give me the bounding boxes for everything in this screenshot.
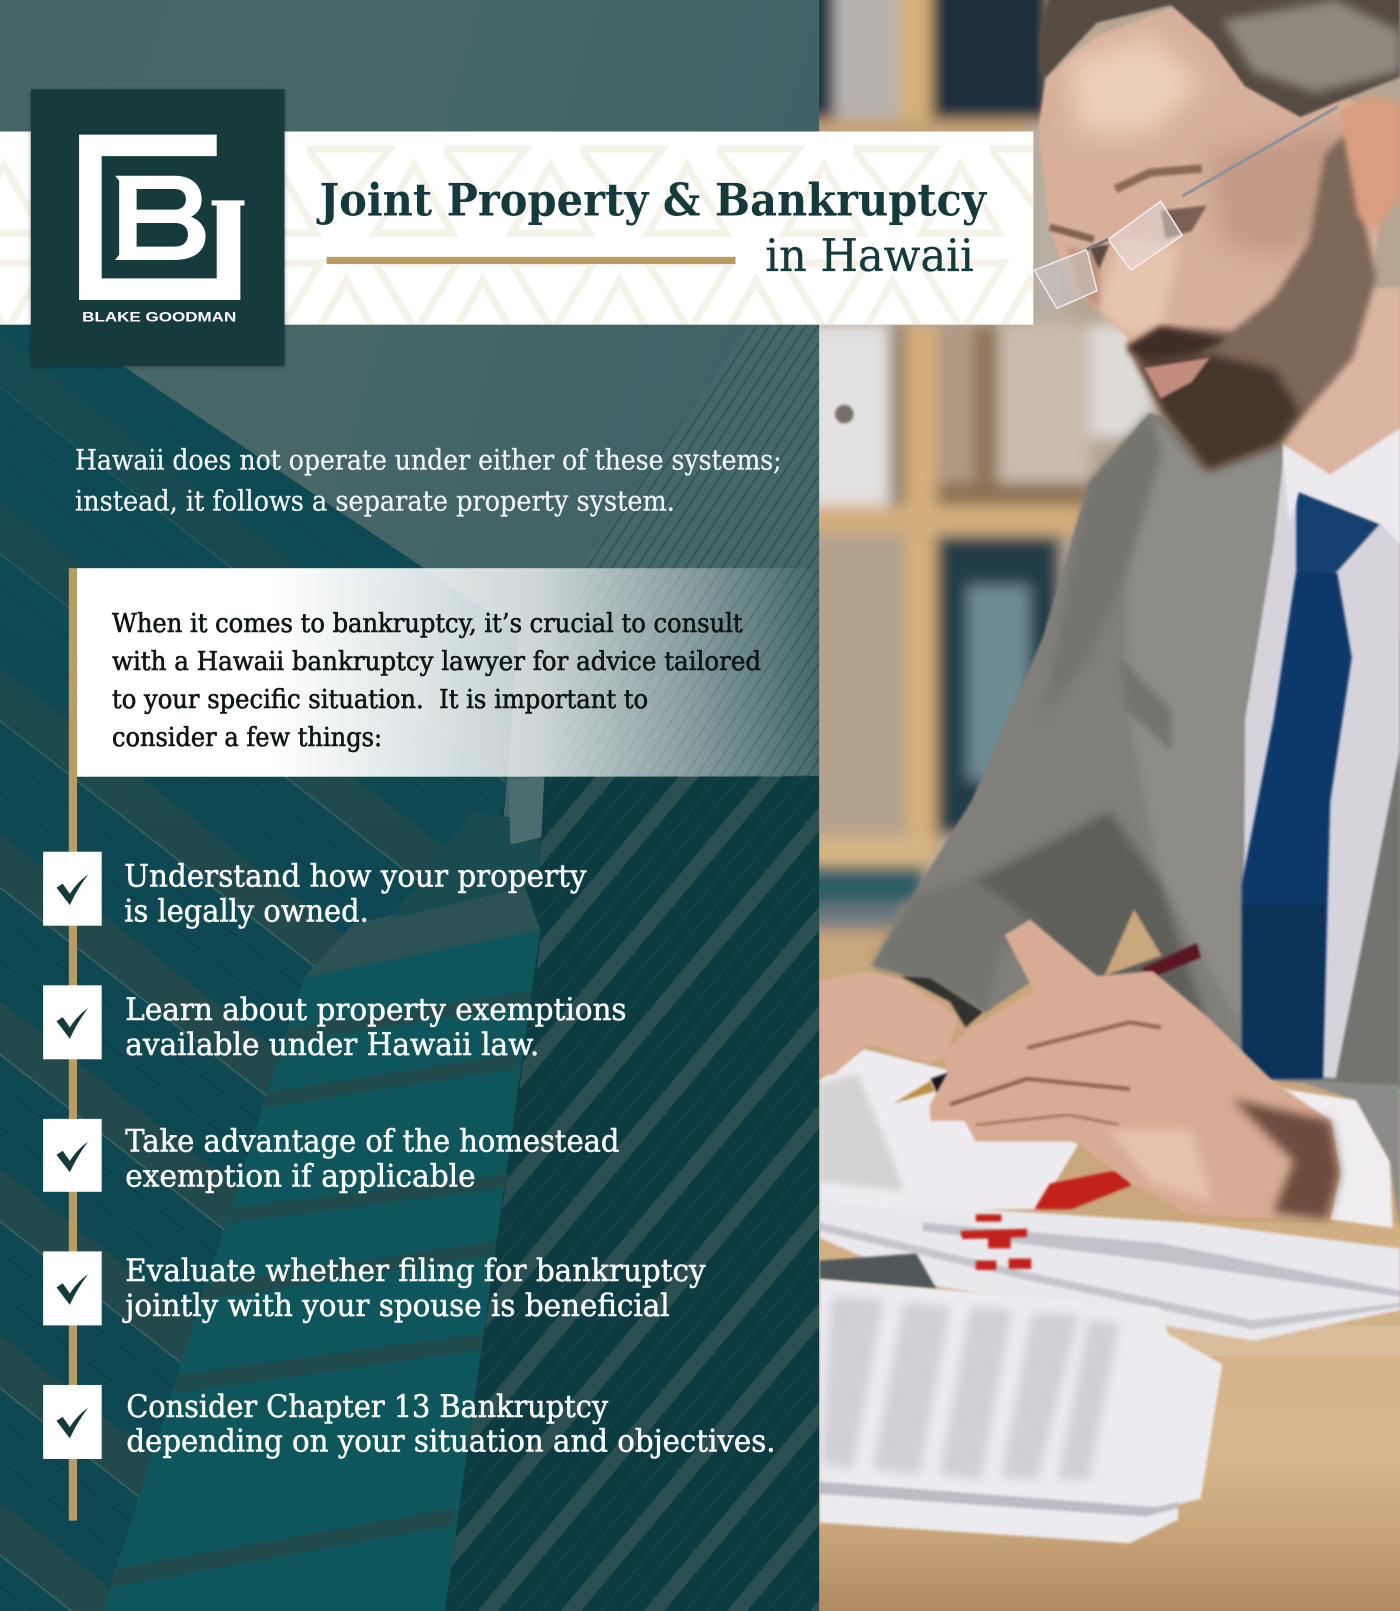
papers: front stack (820, 1279, 1222, 1543)
watch (901, 976, 983, 1027)
red ribbon (960, 1168, 1131, 1270)
man: right lapel (1335, 750, 1400, 1089)
bookshelf background (791, 0, 1400, 1341)
left building face (0, 284, 519, 1611)
man: jacket (872, 413, 1400, 1089)
title: gold rule (327, 257, 735, 264)
callout panel (77, 568, 819, 777)
checklist item 4 (43, 1251, 706, 1325)
checklist item 2: available under Hawaii law. (125, 1027, 539, 1063)
checklist item 5: depending on your situation and objectives. (126, 1424, 775, 1460)
intro text (75, 444, 782, 518)
wood gap (1104, 909, 1162, 976)
callout panel: to your specific situation. It is important to (112, 685, 648, 715)
checklist item 4: Evaluate whether filing for bankruptcy (125, 1253, 706, 1289)
man: neck and collar (1280, 286, 1400, 544)
icon: bracket mark (79, 135, 244, 300)
checklist item 5 (43, 1385, 775, 1460)
man: glasses (1034, 107, 1337, 308)
jacket sleeve right (1300, 1082, 1400, 1230)
man: beard (1127, 134, 1376, 471)
checklist item 1: Understand how your property (124, 859, 587, 895)
cuff (1272, 1087, 1393, 1228)
callout panel: consider a few things: (112, 723, 382, 753)
checklist item 4: jointly with your spouse is beneficial (122, 1288, 670, 1324)
title band (0, 132, 1033, 325)
intro text: Hawaii does not operate under either of these systems; (75, 444, 782, 477)
man: shirt (1243, 432, 1400, 1079)
icon: letter B (115, 176, 206, 260)
checklist item 1: is legally owned. (124, 894, 369, 930)
gold timeline bar (69, 568, 77, 1521)
man: head (1038, 0, 1382, 470)
papers: top sheet and stack (820, 1049, 1400, 1341)
logo: Blake Goodman (31, 89, 285, 366)
panel: office photo (791, 0, 1400, 1611)
checklist item 1 (43, 852, 587, 930)
right hand (930, 920, 1339, 1220)
pen (894, 943, 1201, 1103)
title: sub heading: in Hawaii (765, 229, 974, 282)
right building face (540, 325, 820, 781)
man: tie (1242, 491, 1379, 1079)
left hand (820, 971, 958, 1075)
checklist item 5: Consider Chapter 13 Bankruptcy (126, 1389, 609, 1425)
tablet on desk (820, 1253, 937, 1289)
checklist item 3 (43, 1119, 619, 1195)
callout panel: with a Hawaii bankruptcy lawyer for advice tailored (112, 647, 761, 677)
logo: wordmark: BLAKE GOODMAN (82, 309, 236, 325)
callout panel: When it comes to bankruptcy, it’s crucial to consult (112, 609, 743, 639)
intro text: instead, it follows a separate property system. (75, 485, 675, 518)
checklist item 2 (43, 985, 627, 1063)
man: eyes and brows (1050, 168, 1207, 269)
man: hair (1038, 0, 1400, 117)
title: main heading: Joint Property & Bankruptcy (316, 174, 988, 227)
checklist item 2: Learn about property exemptions (125, 992, 627, 1028)
man: ear (1340, 95, 1400, 231)
checklist item 3: Take advantage of the homestead (125, 1124, 619, 1160)
center building teal face (103, 930, 540, 1611)
panel: building photo background (0, 0, 820, 1611)
desk (819, 1223, 1400, 1611)
checklist item 3: exemption if applicable (125, 1159, 476, 1195)
